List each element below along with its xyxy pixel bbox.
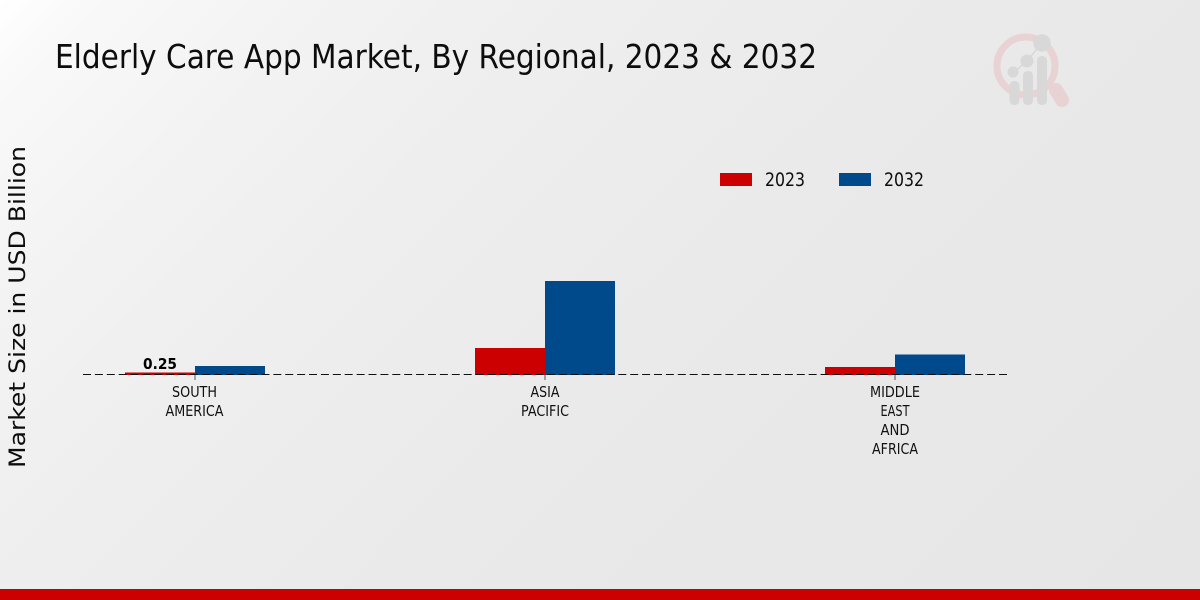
- x-axis label: Asia Pacific: ASIA: [530, 383, 560, 401]
- legend item: 2023: 2023: [765, 169, 805, 191]
- x-axis label: South America: [166, 383, 224, 420]
- x-axis label: South America: SOUTH: [172, 383, 217, 401]
- y-axis title: Market Size in USD Billion: [5, 146, 31, 468]
- x-axis label: South America: AMERICA: [166, 402, 224, 420]
- icon: watermark logo: [997, 34, 1062, 105]
- x-axis label: Middle East and Africa: AND: [880, 421, 910, 439]
- group: Asia Pacific: [475, 281, 615, 375]
- bar chart: [83, 281, 1007, 380]
- x-axis label: Middle East and Africa: AFRICA: [872, 440, 918, 458]
- x-axis label: Asia Pacific: PACIFIC: [521, 402, 569, 420]
- legend item: 2032: [839, 169, 924, 191]
- x-axis label: Middle East and Africa: EAST: [880, 402, 910, 420]
- x-axis label: Middle East and Africa: [870, 383, 920, 458]
- group: Middle East and Africa: [825, 354, 965, 375]
- legend: [720, 169, 924, 191]
- legend item: 2032: 2032: [884, 169, 924, 191]
- x-axis label: Asia Pacific: [521, 383, 569, 420]
- legend item: 2023: [720, 169, 805, 191]
- group: South America: [125, 355, 265, 375]
- footer bar: [0, 589, 1200, 600]
- value label: 0.25: [143, 355, 177, 373]
- title: Elderly Care App Market, By Regional, 2023 & 2032: [55, 37, 817, 76]
- x-axis label: Middle East and Africa: MIDDLE: [870, 383, 920, 401]
